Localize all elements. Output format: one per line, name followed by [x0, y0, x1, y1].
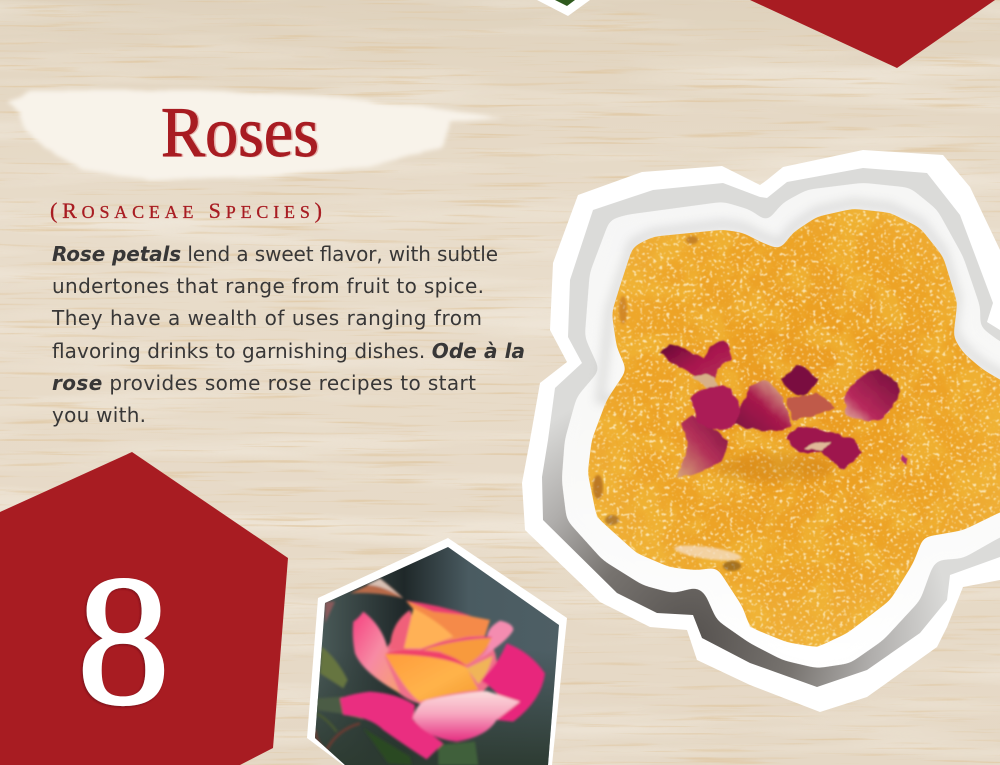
- top small photo hexagon fragment: [537, 0, 590, 16]
- subtitle: Rosaceae Species: (Rosaceae Species): [50, 197, 322, 224]
- brush stroke behind title: [8, 90, 507, 180]
- body text block: [51, 242, 525, 427]
- dish inner wall shading: [600, 203, 1000, 400]
- body text block: rose provides some rose recipes to start: [52, 371, 476, 395]
- body text block: Rose petals lend a sweet flavor, with subtle: [52, 242, 498, 266]
- photo: creme brulee in scalloped white dish: [520, 150, 1000, 712]
- drop shadow of dish: [542, 168, 1000, 687]
- dish rim: [562, 183, 1000, 668]
- red hexagon with number: [0, 452, 288, 765]
- photo: rose in white hexagon frame: [307, 538, 567, 765]
- custard texture: [580, 205, 1000, 650]
- body text block: flavoring drinks to garnishing dishes. Ode à la: [52, 339, 525, 363]
- rose bloom: [340, 601, 545, 759]
- body text block: undertones that range from fruit to spice.: [52, 274, 484, 298]
- dried rose petals: [660, 339, 908, 478]
- custard surface: [588, 209, 1000, 647]
- white cutout outline: [522, 150, 1000, 712]
- title: Roses: Roses: [161, 94, 319, 172]
- top red hexagon fragment: [750, 0, 995, 68]
- body text block: you with.: [52, 403, 146, 427]
- number 8: 8: [77, 538, 170, 744]
- leaves and stems: [315, 578, 478, 765]
- body text block: They have a wealth of uses ranging from: [51, 306, 482, 330]
